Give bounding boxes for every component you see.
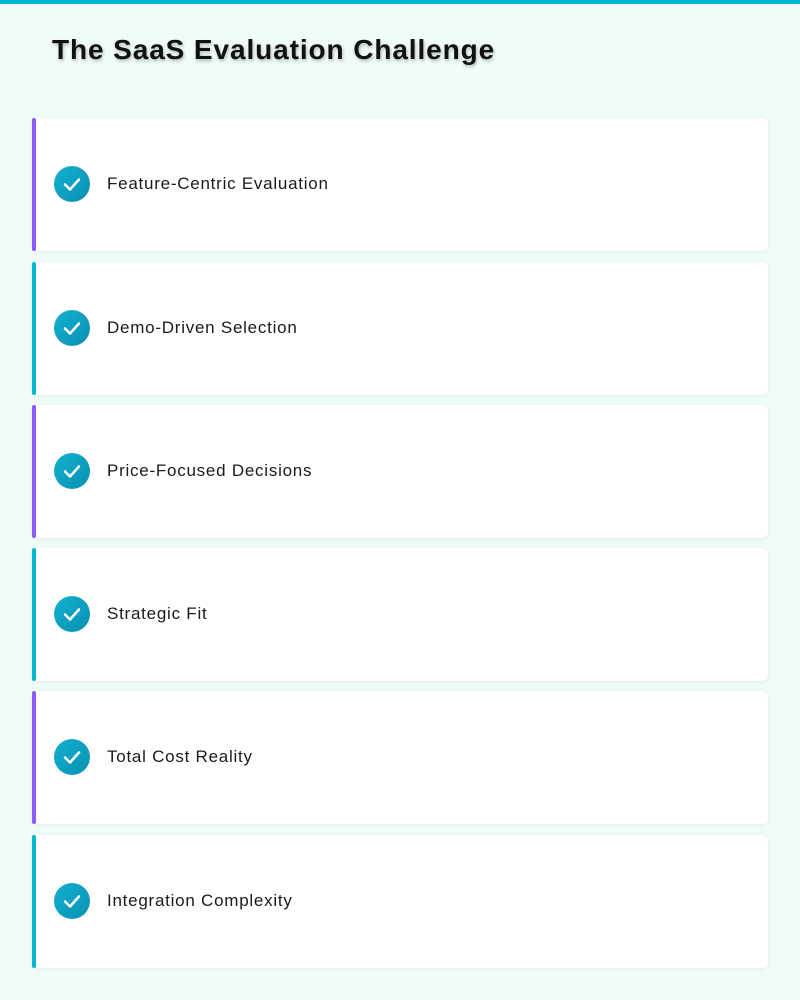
icon: check bbox=[54, 166, 90, 202]
icon: check bbox=[54, 883, 90, 919]
label: Demo-Driven Selection bbox=[107, 318, 298, 337]
label: Total Cost Reality bbox=[107, 747, 253, 766]
icon: check bbox=[54, 739, 90, 775]
label: Feature-Centric Evaluation bbox=[107, 174, 329, 193]
label: Integration Complexity bbox=[107, 891, 293, 910]
label: Price-Focused Decisions bbox=[107, 461, 312, 480]
card: feature-centric bbox=[32, 118, 768, 251]
label: Strategic Fit bbox=[107, 604, 207, 623]
card: total cost bbox=[32, 691, 768, 824]
card: demo-driven bbox=[32, 262, 768, 395]
card: integration bbox=[32, 835, 768, 968]
icon: check bbox=[54, 310, 90, 346]
card: strategic fit bbox=[32, 548, 768, 681]
icon: check bbox=[54, 453, 90, 489]
card: price-focused bbox=[32, 405, 768, 538]
title: The SaaS Evaluation Challenge bbox=[52, 34, 495, 65]
icon: check bbox=[54, 596, 90, 632]
